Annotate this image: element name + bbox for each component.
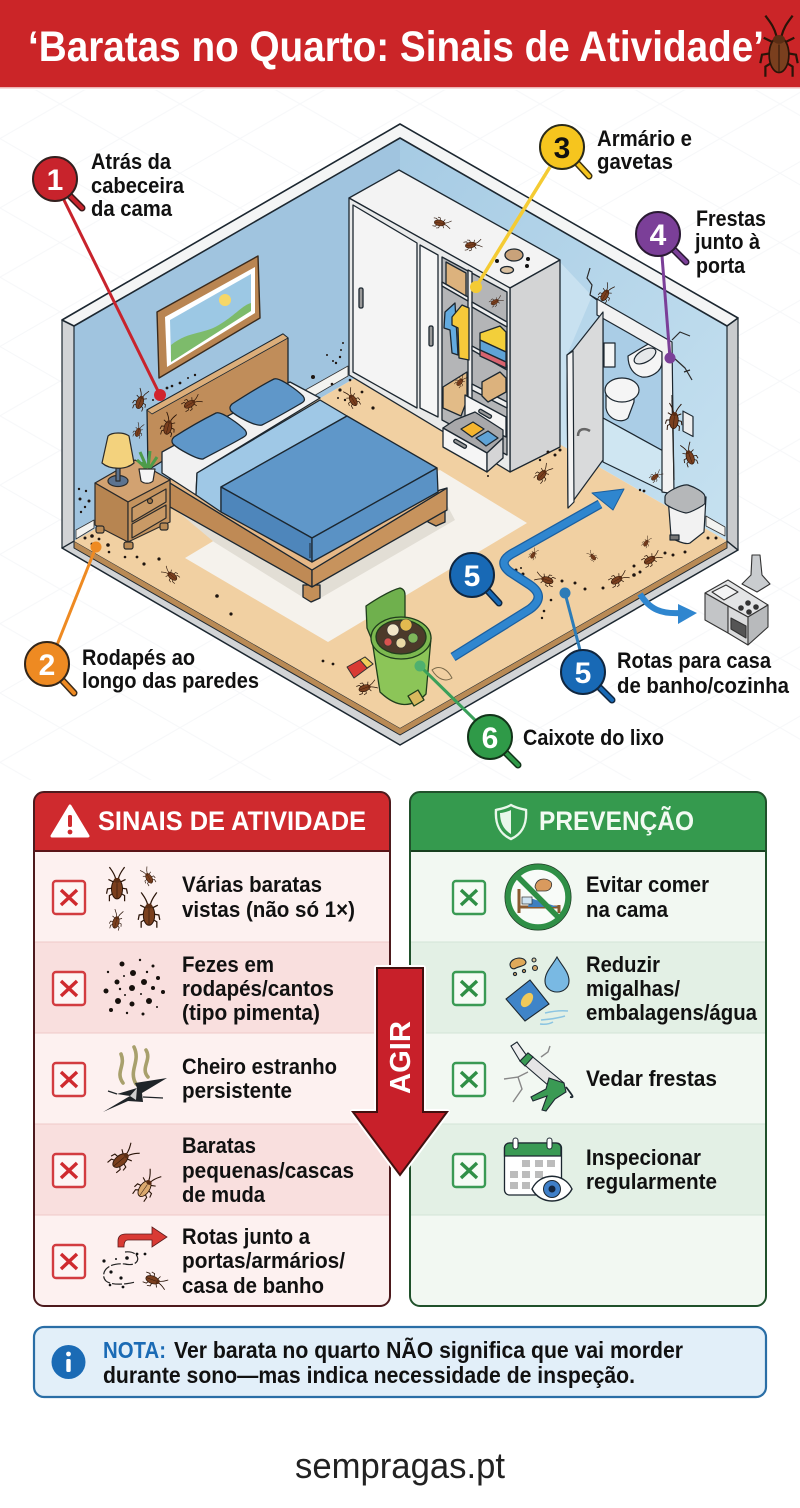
- sign: fezes: [53, 952, 334, 1025]
- footer: website: sempragas.pt: [295, 1445, 505, 1486]
- sign: baratas pequenas: de muda: [182, 1182, 266, 1207]
- light switch: [683, 411, 693, 436]
- panel heading: [34, 792, 390, 851]
- callout 2: Rodapés ao: [82, 645, 195, 670]
- cockroaches in the room: [131, 216, 700, 696]
- sign: baratas pequenas: Baratas: [182, 1133, 256, 1158]
- pillows: [172, 379, 304, 459]
- prevention: evitar comer: na cama: [586, 897, 669, 922]
- droppings on walls and floor: [78, 342, 718, 665]
- callout: nota: Ver barata no quarto NÃO significa que vai morder: [174, 1336, 683, 1363]
- callout 2: [25, 542, 259, 693]
- callout: nota: NOTA:: [103, 1337, 166, 1363]
- sign: baratas pequenas: pequenas/cascas: [182, 1158, 354, 1183]
- icon: cockroach in title: [760, 16, 798, 77]
- callout 2: longo das paredes: [82, 668, 259, 693]
- prevention: reduzir migalhas: embalagens/água: [586, 1000, 758, 1025]
- icon: warning triangle: [52, 806, 88, 836]
- callout 3: 3: [554, 132, 570, 165]
- route arrow to bathroom: [453, 489, 624, 657]
- open shelves: [442, 257, 507, 455]
- prevention: reduzir migalhas: Reduzir: [586, 952, 660, 977]
- bathroom doorway with toilet and sink: [567, 295, 706, 543]
- panel: prevenção: [410, 792, 766, 1306]
- callout 1: [33, 149, 185, 401]
- prevention: inspecionar: regularmente: [586, 1169, 717, 1194]
- snack packet on floor: [347, 657, 373, 678]
- sign: várias baratas: Várias baratas: [182, 872, 322, 897]
- arrow: agir: AGIR: [385, 1021, 417, 1094]
- callout: nota: durante sono—mas indica necessidade de inspeção.: [103, 1362, 635, 1388]
- icon: sink: [628, 343, 662, 377]
- wardrobe: [349, 170, 560, 472]
- callout 1: Atrás da: [91, 149, 172, 174]
- callout 5: Rotas para casa: [617, 648, 772, 673]
- drawers: [443, 395, 506, 472]
- route marker 5 on floor: 5: [464, 560, 480, 593]
- icon: toilet: [604, 343, 639, 421]
- prevention: inspecionar: [453, 1138, 717, 1201]
- headboard: [147, 334, 288, 470]
- items on wardrobe top: [495, 249, 530, 274]
- isometric room illustration: [25, 124, 790, 765]
- mattress and sheet: [162, 382, 438, 562]
- callout 5: de banho/cozinha: [617, 673, 790, 698]
- panel: sinais de atividade: [34, 792, 390, 1306]
- bedside table, lamp and plant: [95, 433, 170, 549]
- callout 3: Armário e: [597, 126, 692, 151]
- route marker 5 on floor: [450, 553, 499, 603]
- callout 4: 4: [650, 219, 667, 252]
- icon: shield: [496, 805, 526, 839]
- callout 3: gavetas: [597, 149, 673, 174]
- sign: rotas: [53, 1224, 345, 1298]
- sign: rotas: casa de banho: [182, 1273, 324, 1298]
- callout 5: [560, 588, 790, 700]
- arrow to kitchen: [640, 594, 697, 624]
- sign: várias baratas: vistas (não só 1×): [182, 897, 355, 922]
- panel heading: PREVENÇÃO: [539, 805, 694, 836]
- callout 4: Frestas: [696, 206, 766, 231]
- icon: info: [52, 1345, 86, 1379]
- rug: [170, 470, 527, 642]
- prevention: inspecionar: Inspecionar: [586, 1145, 701, 1170]
- callout 1: 1: [47, 164, 63, 197]
- sign: rotas: Rotas junto a: [182, 1224, 311, 1249]
- callout: nota: [34, 1327, 766, 1397]
- rubbish bin with food waste: [366, 588, 452, 706]
- icon: kitchen: [705, 555, 770, 645]
- callout 5: 5: [575, 657, 591, 690]
- callout 2: 2: [39, 649, 55, 682]
- sign: baratas pequenas: [53, 1133, 354, 1207]
- sign: fezes: (tipo pimenta): [182, 1000, 320, 1025]
- room shell: walls and floor: [62, 124, 738, 745]
- sign: várias baratas: [53, 866, 355, 931]
- sign: rotas: portas/armários/: [182, 1248, 345, 1273]
- prevention: reduzir migalhas: migalhas/: [586, 976, 680, 1001]
- prevention: vedar frestas: [453, 1042, 717, 1111]
- callout 3: [470, 125, 692, 293]
- prevention: reduzir migalhas: [453, 952, 758, 1025]
- callout 6: 6: [482, 722, 498, 755]
- prevention: evitar comer: [453, 864, 709, 930]
- prevention: evitar comer: Evitar comer: [586, 872, 709, 897]
- wall cracks: [587, 268, 692, 480]
- callout 4: [636, 206, 766, 364]
- callout 6: [414, 660, 664, 765]
- callout 4: porta: [696, 253, 746, 278]
- sliding doors: [353, 205, 438, 417]
- arrow: agir: [353, 968, 447, 1175]
- title banner: [0, 0, 800, 88]
- icon: pedal bin: [665, 485, 706, 543]
- bed frame: [170, 478, 447, 602]
- panel heading: [410, 792, 766, 851]
- callout 6: Caixote do lixo: [523, 725, 664, 750]
- panel heading: SINAIS DE ATIVIDADE: [98, 806, 366, 836]
- sign: cheiro: [53, 1047, 337, 1112]
- sign: cheiro: persistente: [182, 1078, 292, 1103]
- bed: [147, 334, 447, 602]
- prevention: vedar frestas: Vedar frestas: [586, 1066, 717, 1091]
- callout 1: cabeceira: [91, 173, 185, 198]
- sign: fezes: Fezes em: [182, 952, 274, 977]
- sign: fezes: rodapés/cantos: [182, 976, 334, 1001]
- framed picture: [157, 256, 260, 378]
- callout 4: junto à: [694, 229, 761, 254]
- callout 1: da cama: [91, 196, 173, 221]
- sign: cheiro: Cheiro estranho: [182, 1054, 337, 1079]
- icon: open door: [567, 312, 603, 508]
